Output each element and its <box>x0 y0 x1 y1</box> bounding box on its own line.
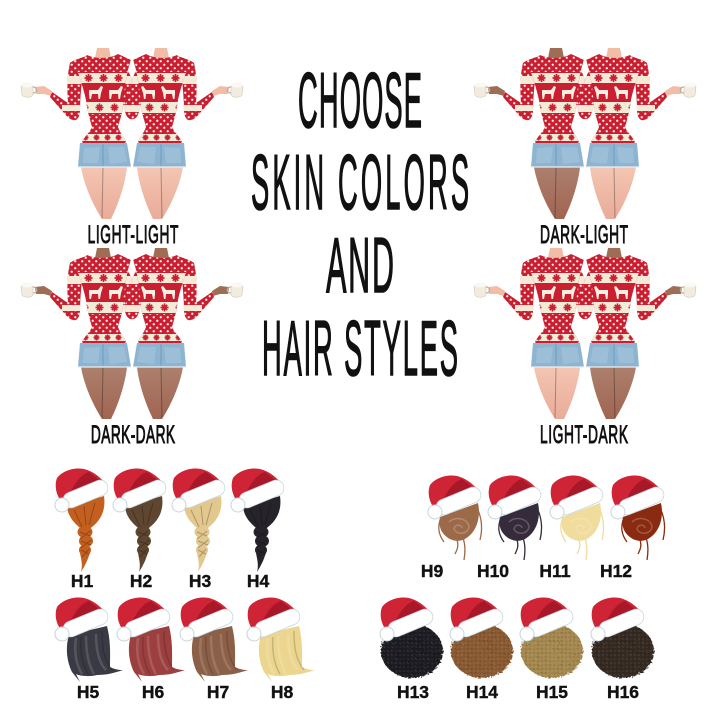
hair H14 <box>450 597 513 678</box>
label H7: H7 <box>207 682 229 702</box>
panel: dark-dark pair <box>21 248 243 449</box>
label: dark-dark: DARK-DARK <box>91 422 175 449</box>
label: dark-light: DARK-LIGHT <box>540 222 628 249</box>
title <box>251 58 469 392</box>
label H5: H5 <box>77 682 99 702</box>
hair H10 <box>488 475 542 560</box>
hair H2 <box>113 468 162 572</box>
panel: dark-light pair <box>474 48 696 249</box>
label H11: H11 <box>539 561 571 581</box>
title: AND <box>326 221 394 309</box>
label H4: H4 <box>247 571 269 591</box>
label H8: H8 <box>271 682 293 702</box>
label H16: H16 <box>607 682 639 702</box>
hair H5 <box>55 597 123 682</box>
label H15: H15 <box>536 682 568 702</box>
panel: light-light pair <box>21 48 243 249</box>
hair H8 <box>247 597 315 682</box>
label H1: H1 <box>71 571 93 591</box>
title: SKIN COLORS <box>251 140 469 226</box>
label H10: H10 <box>477 561 509 581</box>
hair H11 <box>550 475 604 560</box>
label: light-dark: LIGHT-DARK <box>540 422 628 449</box>
label H3: H3 <box>189 571 211 591</box>
hair H15 <box>520 597 583 678</box>
title: CHOOSE <box>298 58 422 144</box>
panel: light-dark pair <box>474 248 696 449</box>
label H14: H14 <box>466 682 498 702</box>
hair H7 <box>180 597 248 682</box>
label H13: H13 <box>397 682 429 702</box>
hair H1 <box>55 468 104 572</box>
label H12: H12 <box>600 561 632 581</box>
label H2: H2 <box>130 571 152 591</box>
hair H12 <box>611 475 665 560</box>
panel: hair styles H9 to H16 <box>380 475 665 702</box>
label H6: H6 <box>142 682 164 702</box>
hair H9 <box>428 475 482 560</box>
hair H6 <box>117 597 185 682</box>
panel: hair styles H1 to H8 <box>55 468 315 702</box>
label: light-light: LIGHT-LIGHT <box>88 222 178 249</box>
hair H4 <box>231 468 280 572</box>
hair H16 <box>591 597 654 678</box>
label H9: H9 <box>421 561 443 581</box>
title: HAIR STYLES <box>262 306 458 392</box>
hair H13 <box>380 597 443 678</box>
hair H3 <box>172 468 221 572</box>
